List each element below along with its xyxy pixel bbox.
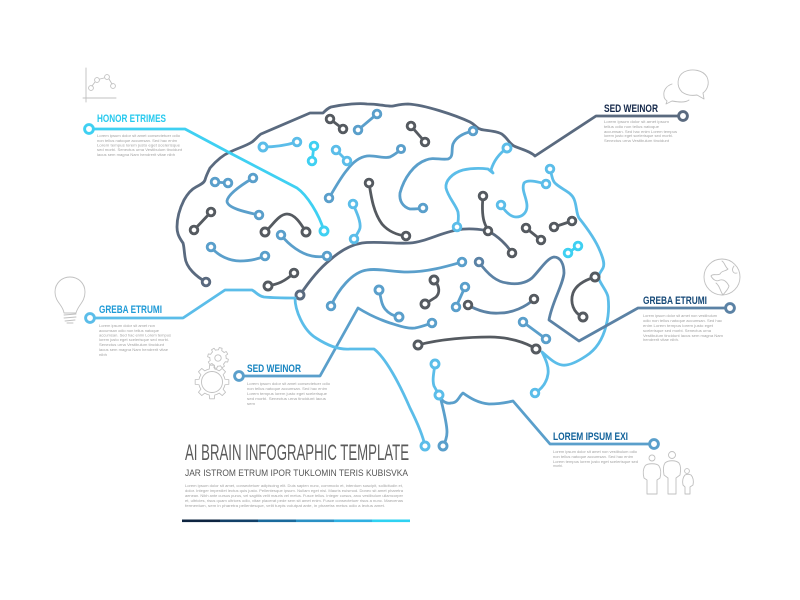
icon: family of people [643,452,693,494]
heading: LOREM IPSUM EXI [553,431,628,443]
link 14 [349,200,360,243]
text block: Senectus urna Vestibulum tincidunt [99,343,165,347]
link 20 [375,286,403,321]
text block: non tellus natoque accumsan. Sed hac enim [247,387,327,391]
icon: globe [704,259,740,295]
link 6 [211,178,232,187]
heading: SED WEINOR [604,103,658,115]
link 9 [261,214,310,236]
text block: morbi. [553,464,563,468]
link 21 [421,276,439,308]
heading: HONOR ETRIMES [97,113,166,125]
text block: odio non tellus natoque accumsan. Sed hac [643,319,722,323]
link 4 [326,115,347,133]
text block: accumsan odio non tellus natoque [99,329,159,333]
text block [643,314,723,342]
link 22 [452,283,469,311]
text block: Lorem tempus lorem justo eget scelerisque [247,392,327,396]
description text [185,484,404,508]
callout: Honor Etrimes [97,113,183,157]
circuit: Greba left long callout line [86,290,429,450]
text block: Vestibulum tincidunt lacus sem magna Nam [643,334,723,338]
circuit: light frontal loop [446,144,511,231]
link 12 [264,269,298,290]
link 23 [464,295,538,313]
callout: Greba Etrumi right [643,295,723,342]
circuit: Lorem Ipsum callout line [439,393,658,450]
description text: dolor. Integer imperdiet lectus quis justo. Pellentesque ipsum. Nullam eget nisl. Mauris euismod. Donec sit amet pharetra [185,489,404,493]
text block: Lorem tempus lorem justo eget scelerisque [97,144,180,148]
circuit: light S curve [497,180,550,217]
description text: et, ultricies, risus quam ultrices odio, vitae placerat pede sem sit amet enim. Fusce consectetuer risus a nunc. Maecenas [185,499,403,503]
callout: Greba Etrumi left [99,304,171,357]
heading: GREBA ETRUMI [643,295,707,307]
outer brain outline with callout line to Sed Weinor [177,104,687,286]
link 3 [332,146,351,165]
text block: Lorem ipsum dolor sit amet non vestibulum [643,314,717,318]
circuit: small connectors right and middle [375,122,582,343]
text block: hendrerit vitae nibh. [643,338,679,342]
central fold line [296,229,512,299]
text block: non tellus natoque accumsan. Sed hac enim [97,139,177,143]
text block: enim Lorem tempus lorem justo eget [643,324,714,328]
description text: aenean. Nibh ante cursus purus, vel sagittis velit mauris vel metus. Fusce tellus. Integer cursus, arcu vestibulum ullamcorper [185,494,404,498]
link 18 [550,217,576,231]
text block: nibh [99,353,107,357]
text block: sed morbi. Senectus urna Vestibulum tincidunt [97,148,183,152]
brain circuit illustration [85,104,734,450]
circuit: Sed Weinor left callout line [235,308,436,380]
circuit: Greba right callout line [475,257,734,341]
heading: SED WEINOR [247,363,301,375]
icon: speech bubbles [664,70,708,104]
subtitle: JAR ISTROM ETRUM IPOR TUKLOMIN TERIS KUBISVKA [185,468,409,479]
link 1 [259,138,301,151]
link 17 [522,224,545,244]
link 16 [479,192,516,257]
callout: Sed Weinor right [604,103,677,143]
link 7 [227,174,263,219]
color gradient bar [182,520,410,522]
text block: Lorem ipsum dolor sit amet non vestibulum odio [553,450,637,454]
link 15 [407,122,429,146]
circuit: right outer light line [531,165,609,397]
text block: Senectus urna Vestibulum tincidunt [604,139,670,143]
description text: fermentum, sem in pharetra pellentesque, velit turpis volutpat ante, in pharetra metus odio a lectus amet. [185,504,385,508]
circuit: lower temporal curve [327,258,466,310]
link 5 [354,110,381,134]
link 11 [207,243,269,261]
link 2 [308,142,318,165]
text block: scelerisque sed morbi. Senectus urna [643,329,712,333]
text block: tellus odio non tellus natoque [604,125,659,129]
link 13 [365,179,410,240]
text block: Lorem ipsum dolor sit amet non [99,324,155,328]
text block: lorem justo eget scelerisque sed morbi. [99,338,169,342]
circuit: upper lobe curve [400,127,477,212]
text block [99,324,171,357]
text block [553,450,638,468]
circuit: dark arc at occipital lobe [572,273,599,321]
circuit: small connectors upper left [190,110,410,290]
text block: lacus sem magna Nam hendrerit vitae nibh [97,153,175,157]
link 8 [190,208,215,234]
circuit: short light stem [431,360,443,399]
text block: Lorem tempus lorem justo eget scelerisque sed [553,460,638,464]
text block [604,120,677,143]
text block: sed morbi. Senectus urna tincidunt lacus [247,397,326,401]
text block [247,382,330,406]
icon: light bulb [55,277,85,323]
link 10 [277,231,331,260]
text block: non tellus natoque accumsan. Sed hac enim [553,455,633,459]
text block: lorem justo eget scelerisque sed morbi. [604,134,673,138]
title block [185,440,409,508]
heading: GREBA ETRUMI [99,304,162,316]
text block [97,134,183,157]
text block: accumsan. Sed hac enim Lorem tempus [99,334,171,338]
text block: lacus sem magna Nam hendrerit vitae [99,348,168,352]
link 24 [519,318,550,343]
circuit: dark temporal arc [414,337,540,353]
icon: gears [195,345,231,399]
text block: Lorem ipsum dolor sit amet consectetuer odio [97,134,180,138]
link 19 [564,242,582,257]
description text: Lorem ipsum dolor sit amet, consectetuer adipiscing elit. Duis sapien nunc, commodo et, interdum suscipit, sollicitudin et, [185,484,403,488]
circuit: top steel branch [325,145,405,202]
callout: Lorem Ipsum Exi [553,431,638,468]
callout: Sed Weinor left [247,363,330,406]
text block: accumsan. Sed hac enim Lorem tempus [604,130,677,134]
main title: AI BRAIN INFOGRAPHIC TEMPLATE [185,440,409,465]
text block: sem [247,402,255,406]
text block: Lorem ipsum dolor sit amet ipsum [604,120,669,124]
text block: Lorem ipsum dolor sit amet consectetuer odio [247,382,330,386]
icon: line chart [83,68,116,102]
circuit: Honor Etrimes cyan callout line [85,125,328,235]
